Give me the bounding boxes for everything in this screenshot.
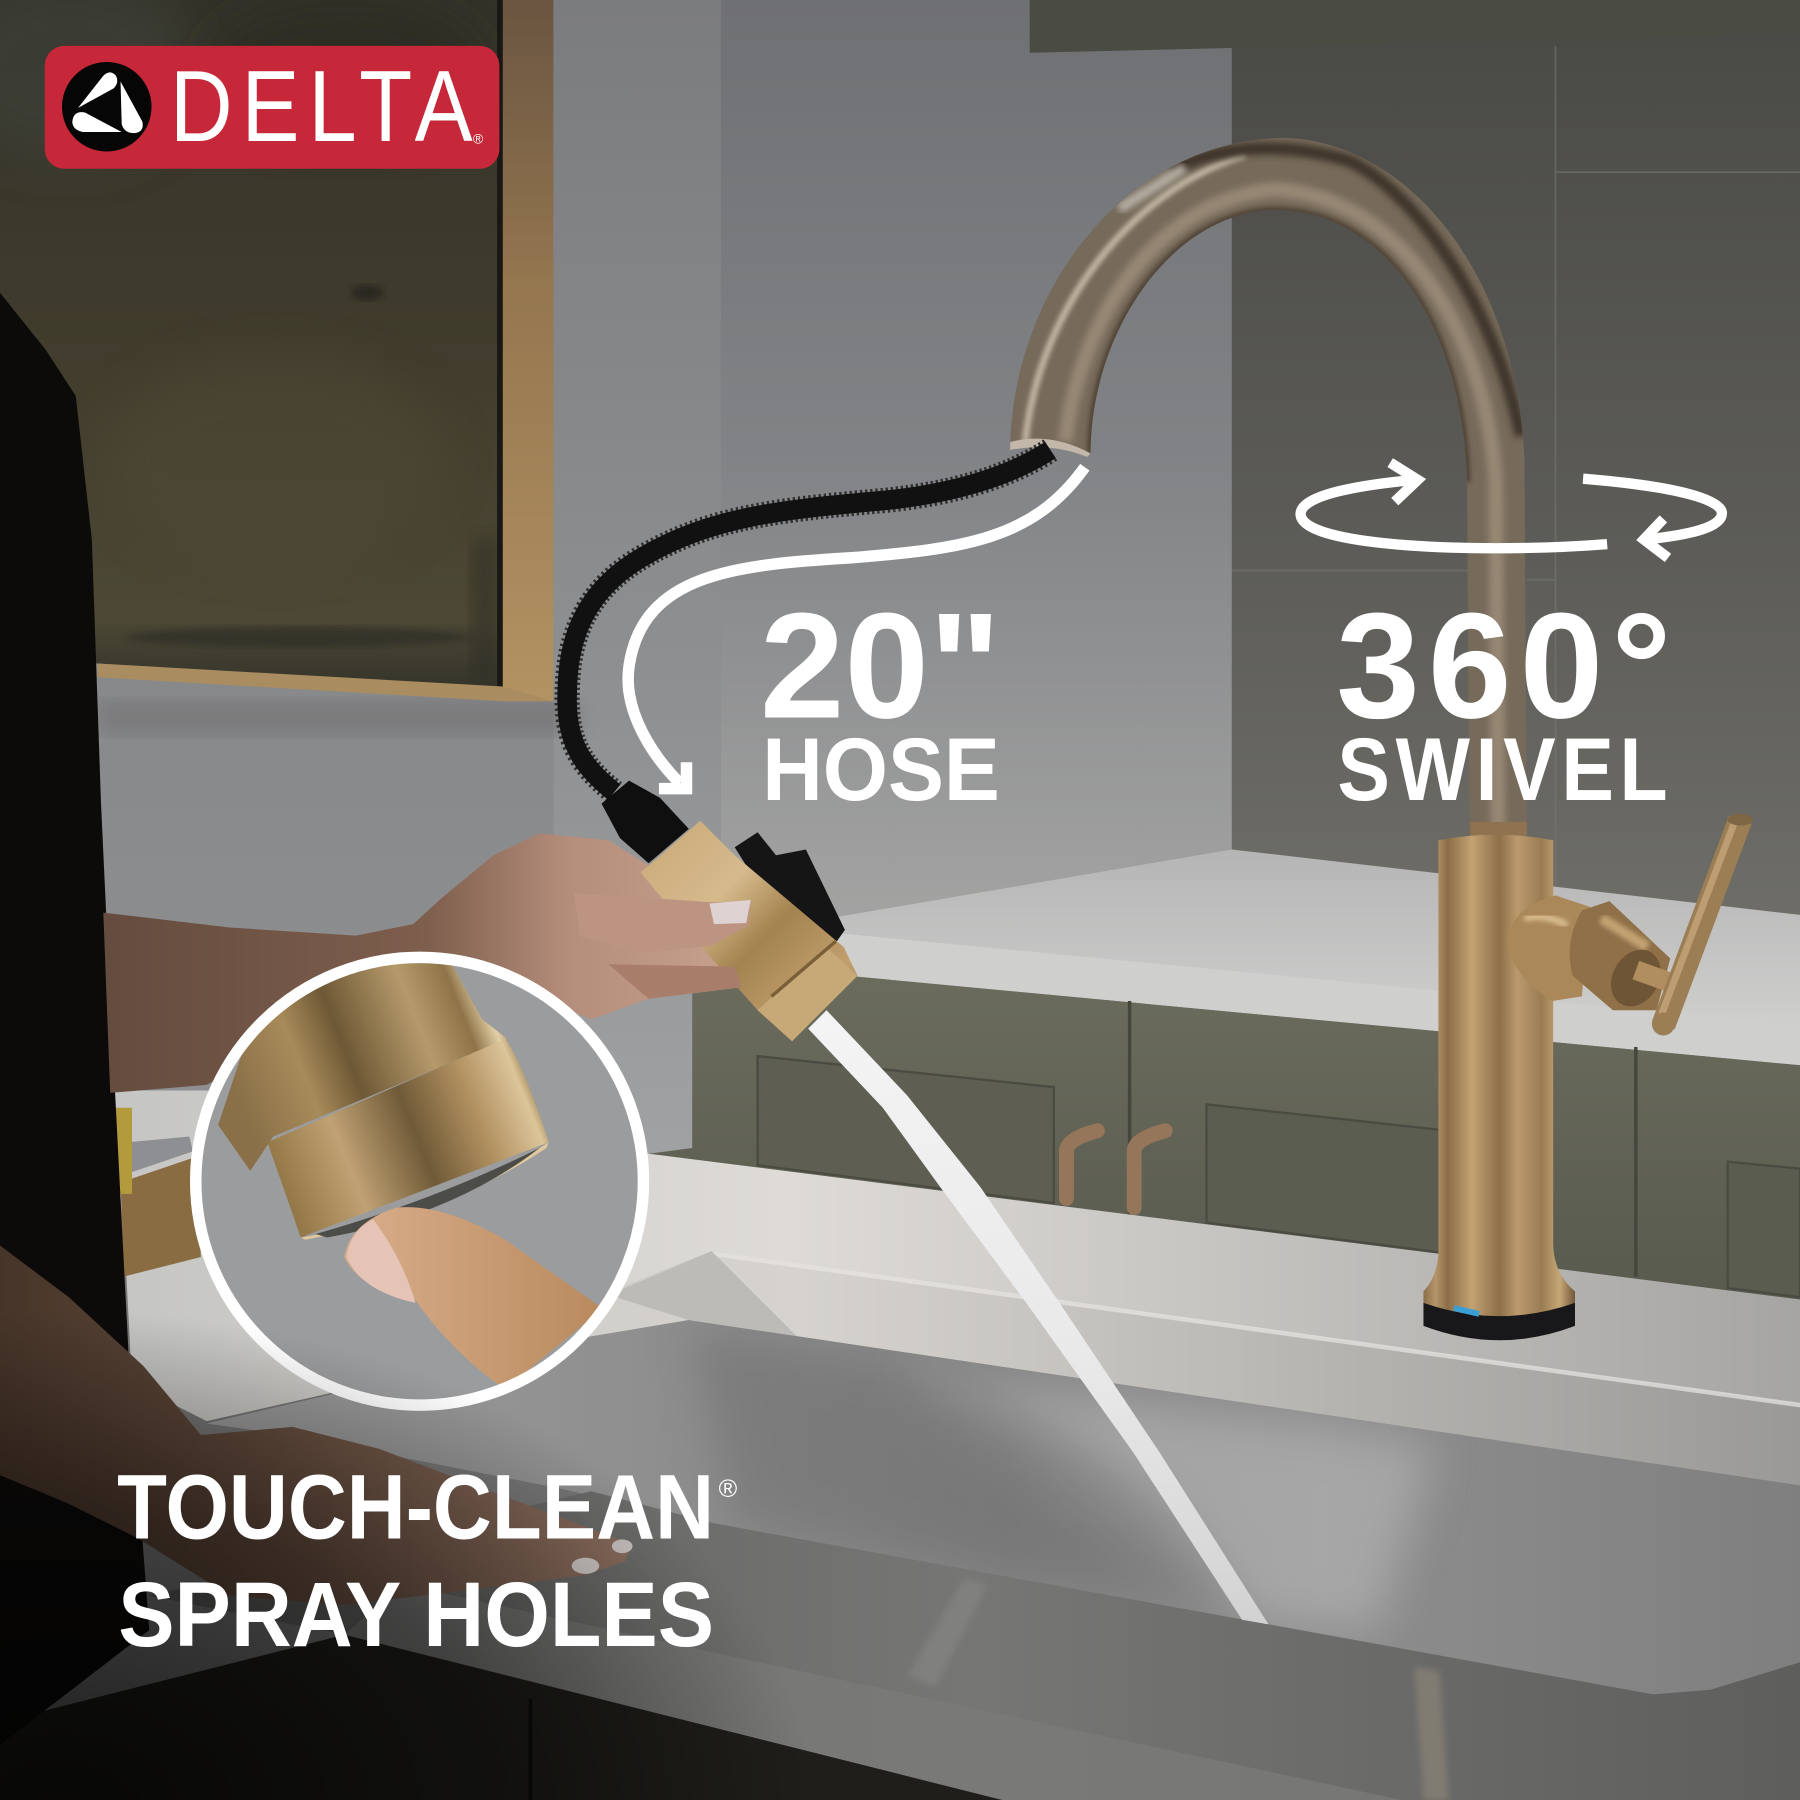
360 degree swivel label: 360° <box>1336 581 1671 749</box>
front sink ledge <box>149 1491 1800 1800</box>
cabinet handles <box>1066 1131 1165 1208</box>
20 inch hose label <box>760 581 1001 819</box>
cutting board on back counter <box>112 1108 201 1277</box>
sink basin <box>207 1320 1800 1694</box>
faucet lever handle <box>1507 814 1753 1035</box>
back countertop <box>827 849 1800 1065</box>
360 degree swivel label: SWIVEL <box>1337 719 1673 819</box>
fingers over spray head <box>574 893 751 999</box>
lower cabinet <box>0 1635 1002 1800</box>
hose length arrow <box>628 467 1085 789</box>
Delta logo badge: ® <box>473 131 483 146</box>
cabinet doors <box>649 970 1800 1303</box>
touch-clean spray holes label: SPRAY HOLES <box>118 1564 714 1666</box>
kitchen wall background <box>0 0 1800 1263</box>
Delta logo badge <box>45 46 499 169</box>
framed painting <box>0 0 553 701</box>
20 inch hose label: 20" <box>760 581 1001 749</box>
20 inch hose label: HOSE <box>762 719 1000 819</box>
inset circle: touch-clean spray face <box>196 953 643 1405</box>
black braided hose <box>567 450 1050 792</box>
logo mark <box>62 62 152 152</box>
lower arm and resting hand <box>0 1246 633 1605</box>
bottom-left shadow vignette <box>0 1033 1148 1800</box>
touch-clean spray holes label: TOUCH-CLEAN <box>117 1456 714 1558</box>
person's dark clothing <box>0 293 149 1745</box>
fingertip <box>344 1207 603 1389</box>
Delta logo badge: DELTA <box>170 50 481 163</box>
sink rim <box>132 1251 1800 1485</box>
raised arm and hand <box>103 833 751 1093</box>
upper cabinet <box>1030 0 1800 53</box>
sink countertop <box>112 1091 1800 1410</box>
faucet body and base <box>1423 835 1575 1340</box>
water stream <box>808 1010 1268 1624</box>
touch-clean spray holes label <box>117 1456 738 1666</box>
touch-clean spray holes label: ® <box>719 1475 738 1503</box>
faucet spout <box>1010 138 1527 838</box>
pull-down spray head <box>602 781 858 1041</box>
swivel rotation arrows <box>1301 463 1722 558</box>
